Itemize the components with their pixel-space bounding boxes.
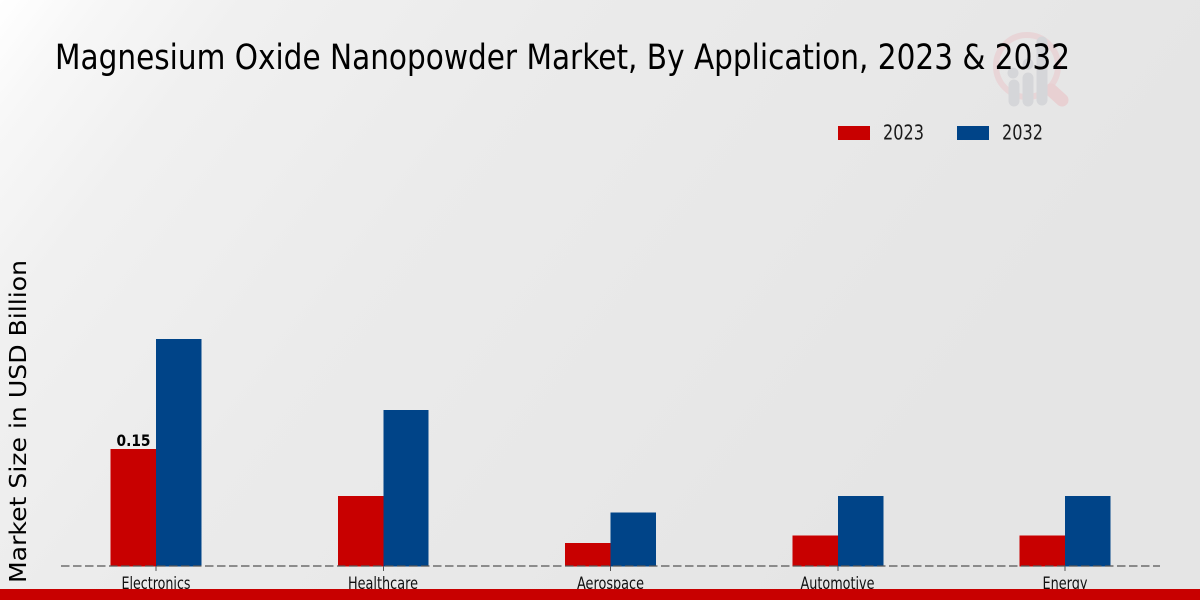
bars: Electronics — [110, 339, 202, 566]
category labels — [122, 574, 1088, 594]
dashed baseline — [61, 565, 1160, 567]
legend swatch: 2023 — [838, 126, 870, 140]
category labels: Aerospace — [577, 574, 644, 594]
category labels: Healthcare — [348, 574, 418, 594]
bar chart — [61, 339, 1160, 594]
footer bar — [0, 589, 1200, 600]
icon: watermark magnifier logo — [996, 35, 1062, 101]
legend label: 2023: 2023 — [883, 120, 924, 144]
y axis title: Market Size in USD Billion — [4, 260, 32, 583]
bars: Automotive — [792, 496, 884, 566]
bars: Healthcare — [338, 410, 428, 566]
axis ticks — [156, 566, 1065, 571]
legend swatch: 2032 — [957, 126, 989, 140]
data label: 0.15: 0.15 — [116, 431, 150, 450]
legend — [838, 120, 1043, 144]
category labels: Electronics — [122, 574, 191, 594]
category labels: Automotive — [800, 574, 874, 594]
category labels: Energy — [1042, 574, 1088, 594]
bars: Energy — [1020, 496, 1110, 566]
legend label: 2032: 2032 — [1002, 120, 1043, 144]
bars: Aerospace — [565, 512, 656, 566]
